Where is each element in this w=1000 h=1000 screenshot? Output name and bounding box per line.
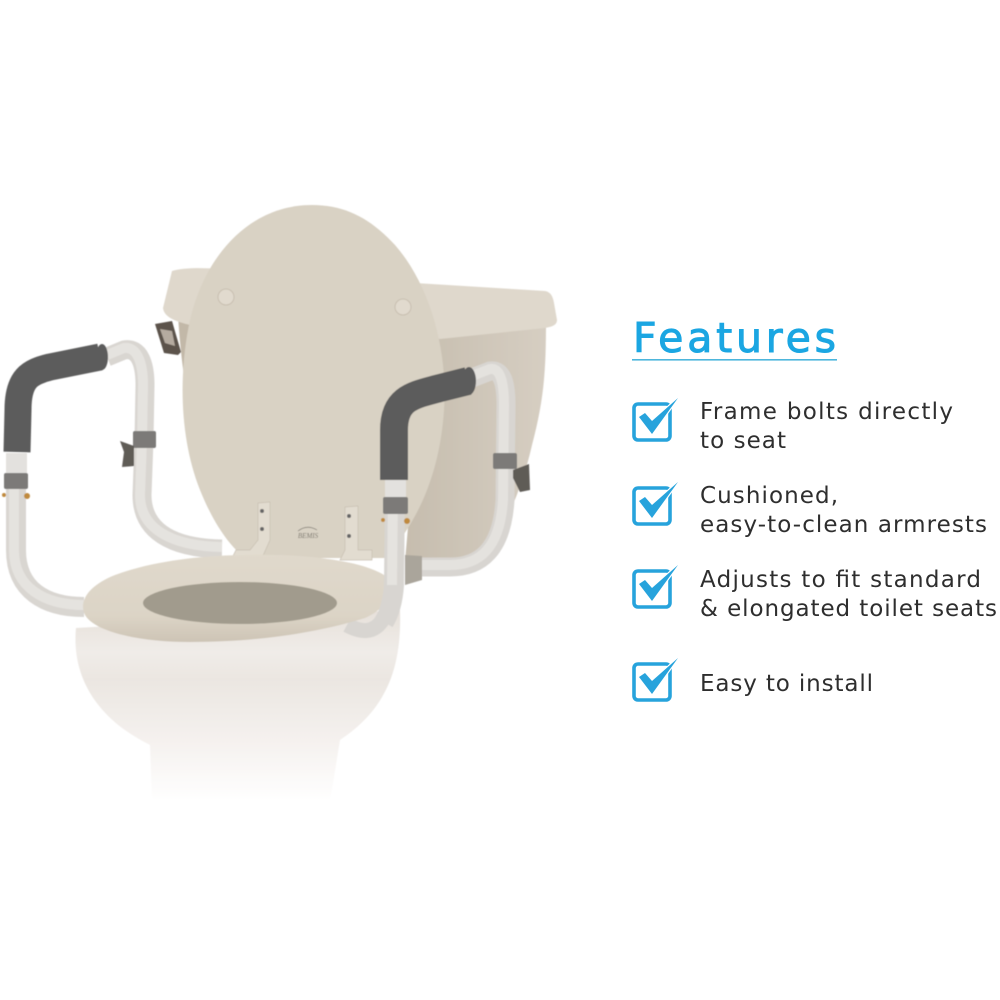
heading underline xyxy=(632,359,837,361)
flush handle xyxy=(155,321,181,355)
right hinge xyxy=(340,506,372,560)
left hinge xyxy=(232,502,270,558)
wing nuts xyxy=(120,441,530,492)
feature 3: & elongated toilet seats xyxy=(700,596,997,622)
tank lid left side xyxy=(163,268,225,325)
left foam armrest xyxy=(17,357,100,452)
checkbox icon xyxy=(634,565,678,607)
product photo: toilet with safety rails xyxy=(2,205,557,802)
seat lid xyxy=(183,205,445,558)
panel: features xyxy=(632,314,997,700)
brass screws xyxy=(2,493,410,524)
feature 1: to seat xyxy=(700,428,786,454)
tank lid right side xyxy=(415,283,557,339)
bemis logo: BEMIS xyxy=(298,532,319,540)
toilet tank body xyxy=(405,322,546,564)
bemis logo xyxy=(298,527,319,540)
checkbox icon xyxy=(634,398,678,440)
features heading: Features xyxy=(633,314,836,362)
checkbox icon xyxy=(634,658,678,700)
feature 1 xyxy=(634,398,953,454)
toilet seat xyxy=(83,555,391,642)
right front tube lower curve xyxy=(347,560,395,631)
right foam armrest xyxy=(394,381,468,480)
feature 2: Cushioned, xyxy=(700,483,838,509)
feature 1: Frame bolts directly xyxy=(700,399,953,425)
feature 2: easy-to-clean armrests xyxy=(700,512,987,538)
left front tube xyxy=(14,470,84,607)
right rear tube xyxy=(412,369,506,567)
lid bumper right xyxy=(395,299,411,315)
rear clamp bracket xyxy=(405,555,422,585)
tube necks xyxy=(6,453,406,497)
seat opening xyxy=(143,582,337,624)
adjustment bands xyxy=(4,431,517,514)
tank left side xyxy=(178,315,200,420)
feature 4 xyxy=(634,658,873,700)
feature 4: Easy to install xyxy=(700,671,873,697)
right front tube xyxy=(384,490,395,622)
checkbox icon xyxy=(634,482,678,524)
feature 2 xyxy=(634,482,987,538)
toilet bowl xyxy=(75,610,400,802)
left arm rear tube xyxy=(107,348,222,549)
lid bumper left xyxy=(218,289,234,305)
feature 3: Adjusts to fit standard xyxy=(700,567,981,593)
feature 3 xyxy=(634,565,997,622)
